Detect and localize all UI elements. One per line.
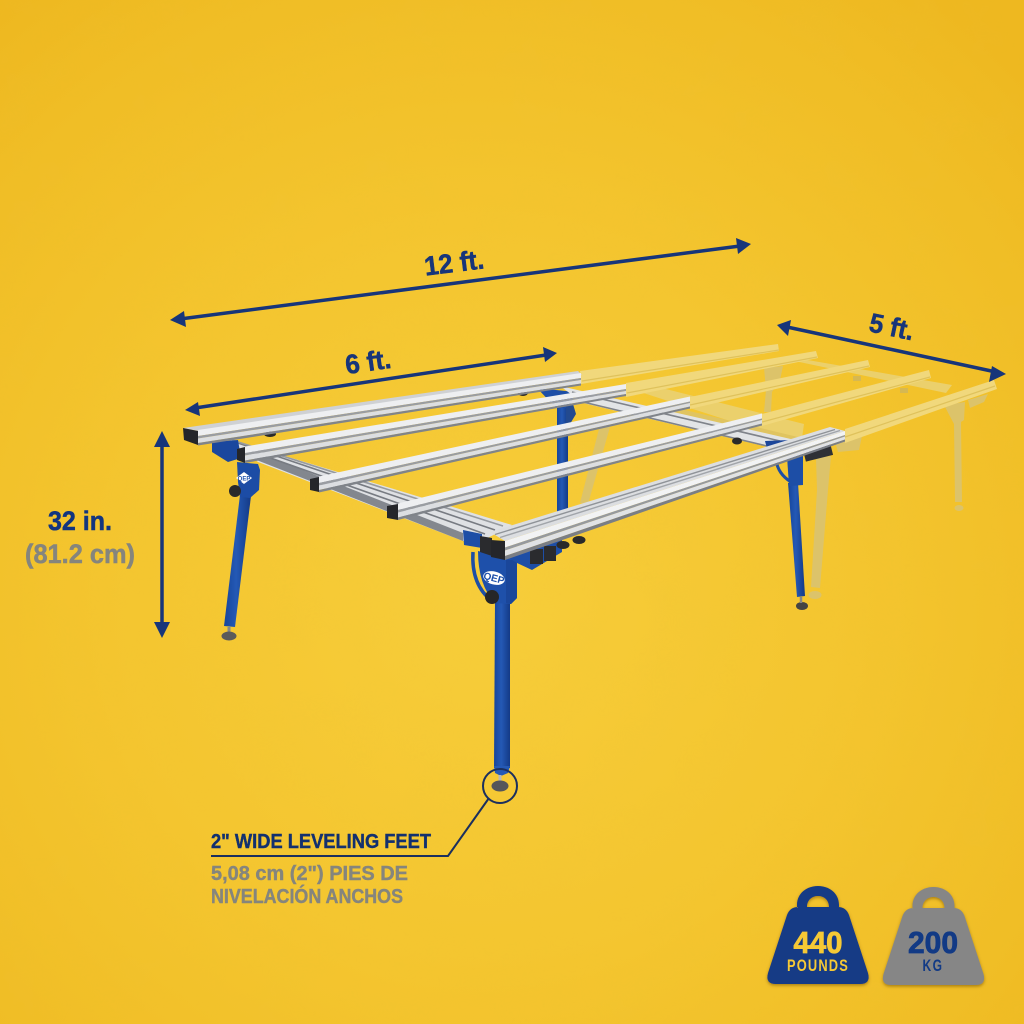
callout Spanish text: 5,08 cm (2") PIES DE [211, 863, 408, 885]
ghost rails [580, 344, 997, 443]
leg: front left: QEP [238, 476, 250, 482]
back leg [518, 388, 576, 512]
label: 32 in: 32 in. [48, 506, 112, 536]
leg: center with leveling foot: QEP [482, 571, 506, 587]
weight badge: 200 kg: 200 [908, 926, 958, 960]
ghost extended table [580, 344, 997, 599]
label: 12 ft: 12 ft. [423, 244, 486, 282]
arrow: height [154, 431, 170, 638]
rail 1 [183, 371, 582, 446]
rail 5 [490, 427, 845, 560]
arrow: 5 ft [777, 320, 1006, 382]
rail 2 [237, 384, 626, 463]
leg: center with leveling foot [473, 551, 517, 792]
leg: right [776, 443, 833, 610]
label: 81.2 cm: (81.2 cm) [25, 539, 135, 569]
arrow: 12 ft [170, 238, 751, 327]
callout Spanish text: NIVELACIÓN ANCHOS [211, 884, 403, 908]
label: 6 ft: 6 ft. [343, 344, 393, 380]
rail 4 [387, 414, 762, 520]
leg: front left [222, 462, 260, 640]
callout heading: 2" WIDE LEVELING FEET [211, 830, 431, 853]
weight badge: 440 pounds: POUNDS [787, 957, 849, 975]
weight badge: 200 kg: KG [922, 957, 944, 975]
arrow: 6 ft [185, 347, 557, 416]
label: 5 ft: 5 ft. [867, 308, 917, 346]
callout circle and leader [211, 769, 517, 856]
callout: leveling feet [211, 769, 517, 908]
ghost cross rails [628, 358, 952, 448]
ghost legs [580, 366, 988, 599]
center brackets [463, 530, 586, 570]
cross rail front [226, 438, 512, 541]
left plate [212, 431, 276, 462]
weight badge: 200 kg [883, 887, 984, 985]
weight badge: 440 pounds [767, 886, 869, 984]
cross rail back [560, 386, 795, 452]
table [183, 371, 845, 792]
weight badge: 440 pounds: 440 [794, 926, 842, 960]
callout Spanish text [211, 863, 408, 908]
rail 3 [310, 396, 690, 492]
